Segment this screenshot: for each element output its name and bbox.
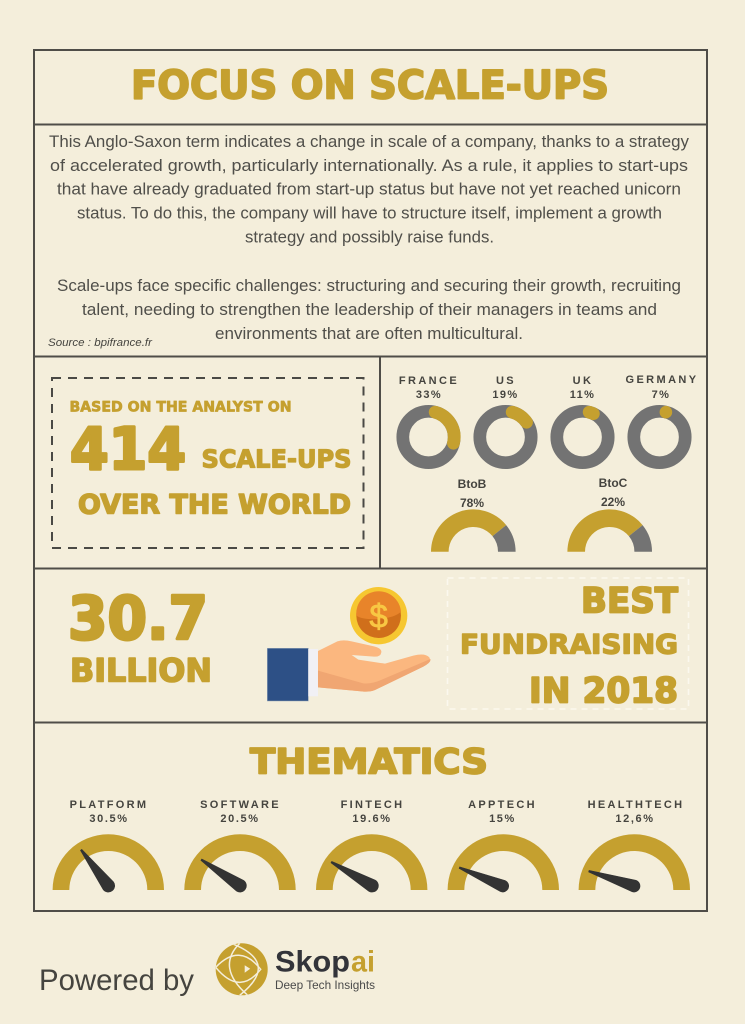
callout line: best: BEST — [581, 581, 678, 621]
panel: country and model charts — [380, 356, 707, 568]
stat unit: SCALE-UPS — [202, 444, 352, 474]
icon: hand holding coin: $ — [369, 599, 388, 636]
panel: thematics — [34, 722, 707, 911]
gauge: platform 30.5% — [53, 799, 164, 895]
amount unit: BILLION — [70, 651, 212, 689]
text block: challenges — [57, 277, 681, 343]
gauge: platform 30.5%: PLATFORM — [70, 799, 148, 811]
stat scope: OVER THE WORLD — [78, 490, 351, 520]
footer: powered by: Powered by — [39, 964, 194, 997]
stat label: BASED ON THE ANALYST ON — [70, 400, 292, 416]
donut: UK 11% — [557, 375, 608, 463]
donut: US 19% — [480, 375, 531, 463]
callout line: year: IN 2018 — [529, 671, 678, 711]
half donut: BtoC 22%: 22% — [601, 495, 625, 509]
text block: challenges: talent, needing to strengthen the leadership of their managers in teams and — [82, 301, 657, 319]
donut: US 19%: US — [496, 375, 516, 387]
dashed frame: best fundraising — [448, 578, 688, 709]
text block: definition: that have already graduated from start-up status but have not yet reached unicorn — [57, 180, 681, 198]
text block: definition: of accelerated growth, particularly internationally. As a rule, it applies to start-ups — [50, 157, 688, 175]
icon: logo mark — [216, 943, 268, 995]
donut: France 33%: 33% — [416, 389, 442, 401]
donut: UK 11%: UK — [573, 375, 593, 387]
source note: Source : bpifrance.fr — [48, 337, 153, 349]
gauge: apptech 15% — [448, 799, 559, 894]
donut: France 33%: FRANCE — [399, 375, 459, 387]
gauge: fintech 19.6%: FINTECH — [341, 799, 404, 811]
gauge: platform 30.5%: 30.5% — [89, 813, 129, 825]
gauge: software 20.5%: SOFTWARE — [200, 799, 281, 811]
donut: UK 11%: 11% — [570, 389, 595, 401]
text block: definition: This Anglo-Saxon term indicates a change in scale of a company, thanks to a strategy — [49, 133, 690, 151]
half donut: BtoB 78%: 78% — [460, 496, 484, 510]
half donut: BtoC 22% — [567, 476, 652, 552]
amount number: 30.7 — [68, 584, 208, 654]
gauge: healthtech 12,6%: 12,6% — [615, 813, 655, 825]
logo wordmark accent: ai — [351, 946, 375, 978]
logo: Skopai — [216, 943, 375, 995]
donut: Germany 7%: GERMANY — [625, 374, 699, 386]
icon: hand holding coin — [267, 587, 430, 701]
panel: 414 scale-ups — [34, 356, 380, 568]
gauge: apptech 15%: APPTECH — [468, 799, 537, 811]
title: FOCUS ON SCALE-UPS — [131, 62, 609, 108]
dashed frame — [52, 378, 364, 548]
gauge: healthtech 12,6%: HEALTHTECH — [588, 799, 684, 811]
gauge: apptech 15%: 15% — [489, 813, 516, 825]
donut: US 19%: 19% — [492, 389, 519, 401]
half donut: BtoC 22%: BtoC — [599, 476, 628, 490]
donut: France 33% — [399, 375, 459, 463]
callout line: fundraising: FUNDRAISING — [460, 630, 678, 660]
panel: title — [34, 50, 707, 124]
panel: fundraising — [34, 568, 707, 722]
gauge: fintech 19.6% — [316, 799, 427, 894]
half donut: BtoB 78% — [431, 477, 516, 552]
text block: definition — [49, 133, 690, 246]
text block: challenges: Scale-ups face specific challenges: structuring and securing their growth, recruiting — [57, 277, 681, 295]
logo tagline: Deep Tech Insights — [275, 978, 375, 992]
heading: thematics: THEMATICS — [250, 742, 488, 782]
gauge: healthtech 12,6% — [579, 799, 690, 894]
logo wordmark: Skop — [275, 946, 350, 978]
half donut: BtoB 78%: BtoB — [458, 477, 487, 491]
gauge: fintech 19.6%: 19.6% — [352, 813, 392, 825]
text block: definition: status. To do this, the company will have to structure itself, implement a growth — [77, 204, 662, 222]
stat number: 414 — [70, 415, 186, 483]
text block: challenges: environments that are often multicultural. — [215, 325, 523, 343]
gauge: software 20.5% — [184, 799, 296, 895]
text block: definition: strategy and possibly raise funds. — [245, 228, 494, 246]
donut: Germany 7% — [625, 374, 699, 463]
donut: Germany 7%: 7% — [652, 389, 670, 401]
panel: definition text — [34, 124, 707, 356]
gauge: software 20.5%: 20.5% — [220, 813, 260, 825]
